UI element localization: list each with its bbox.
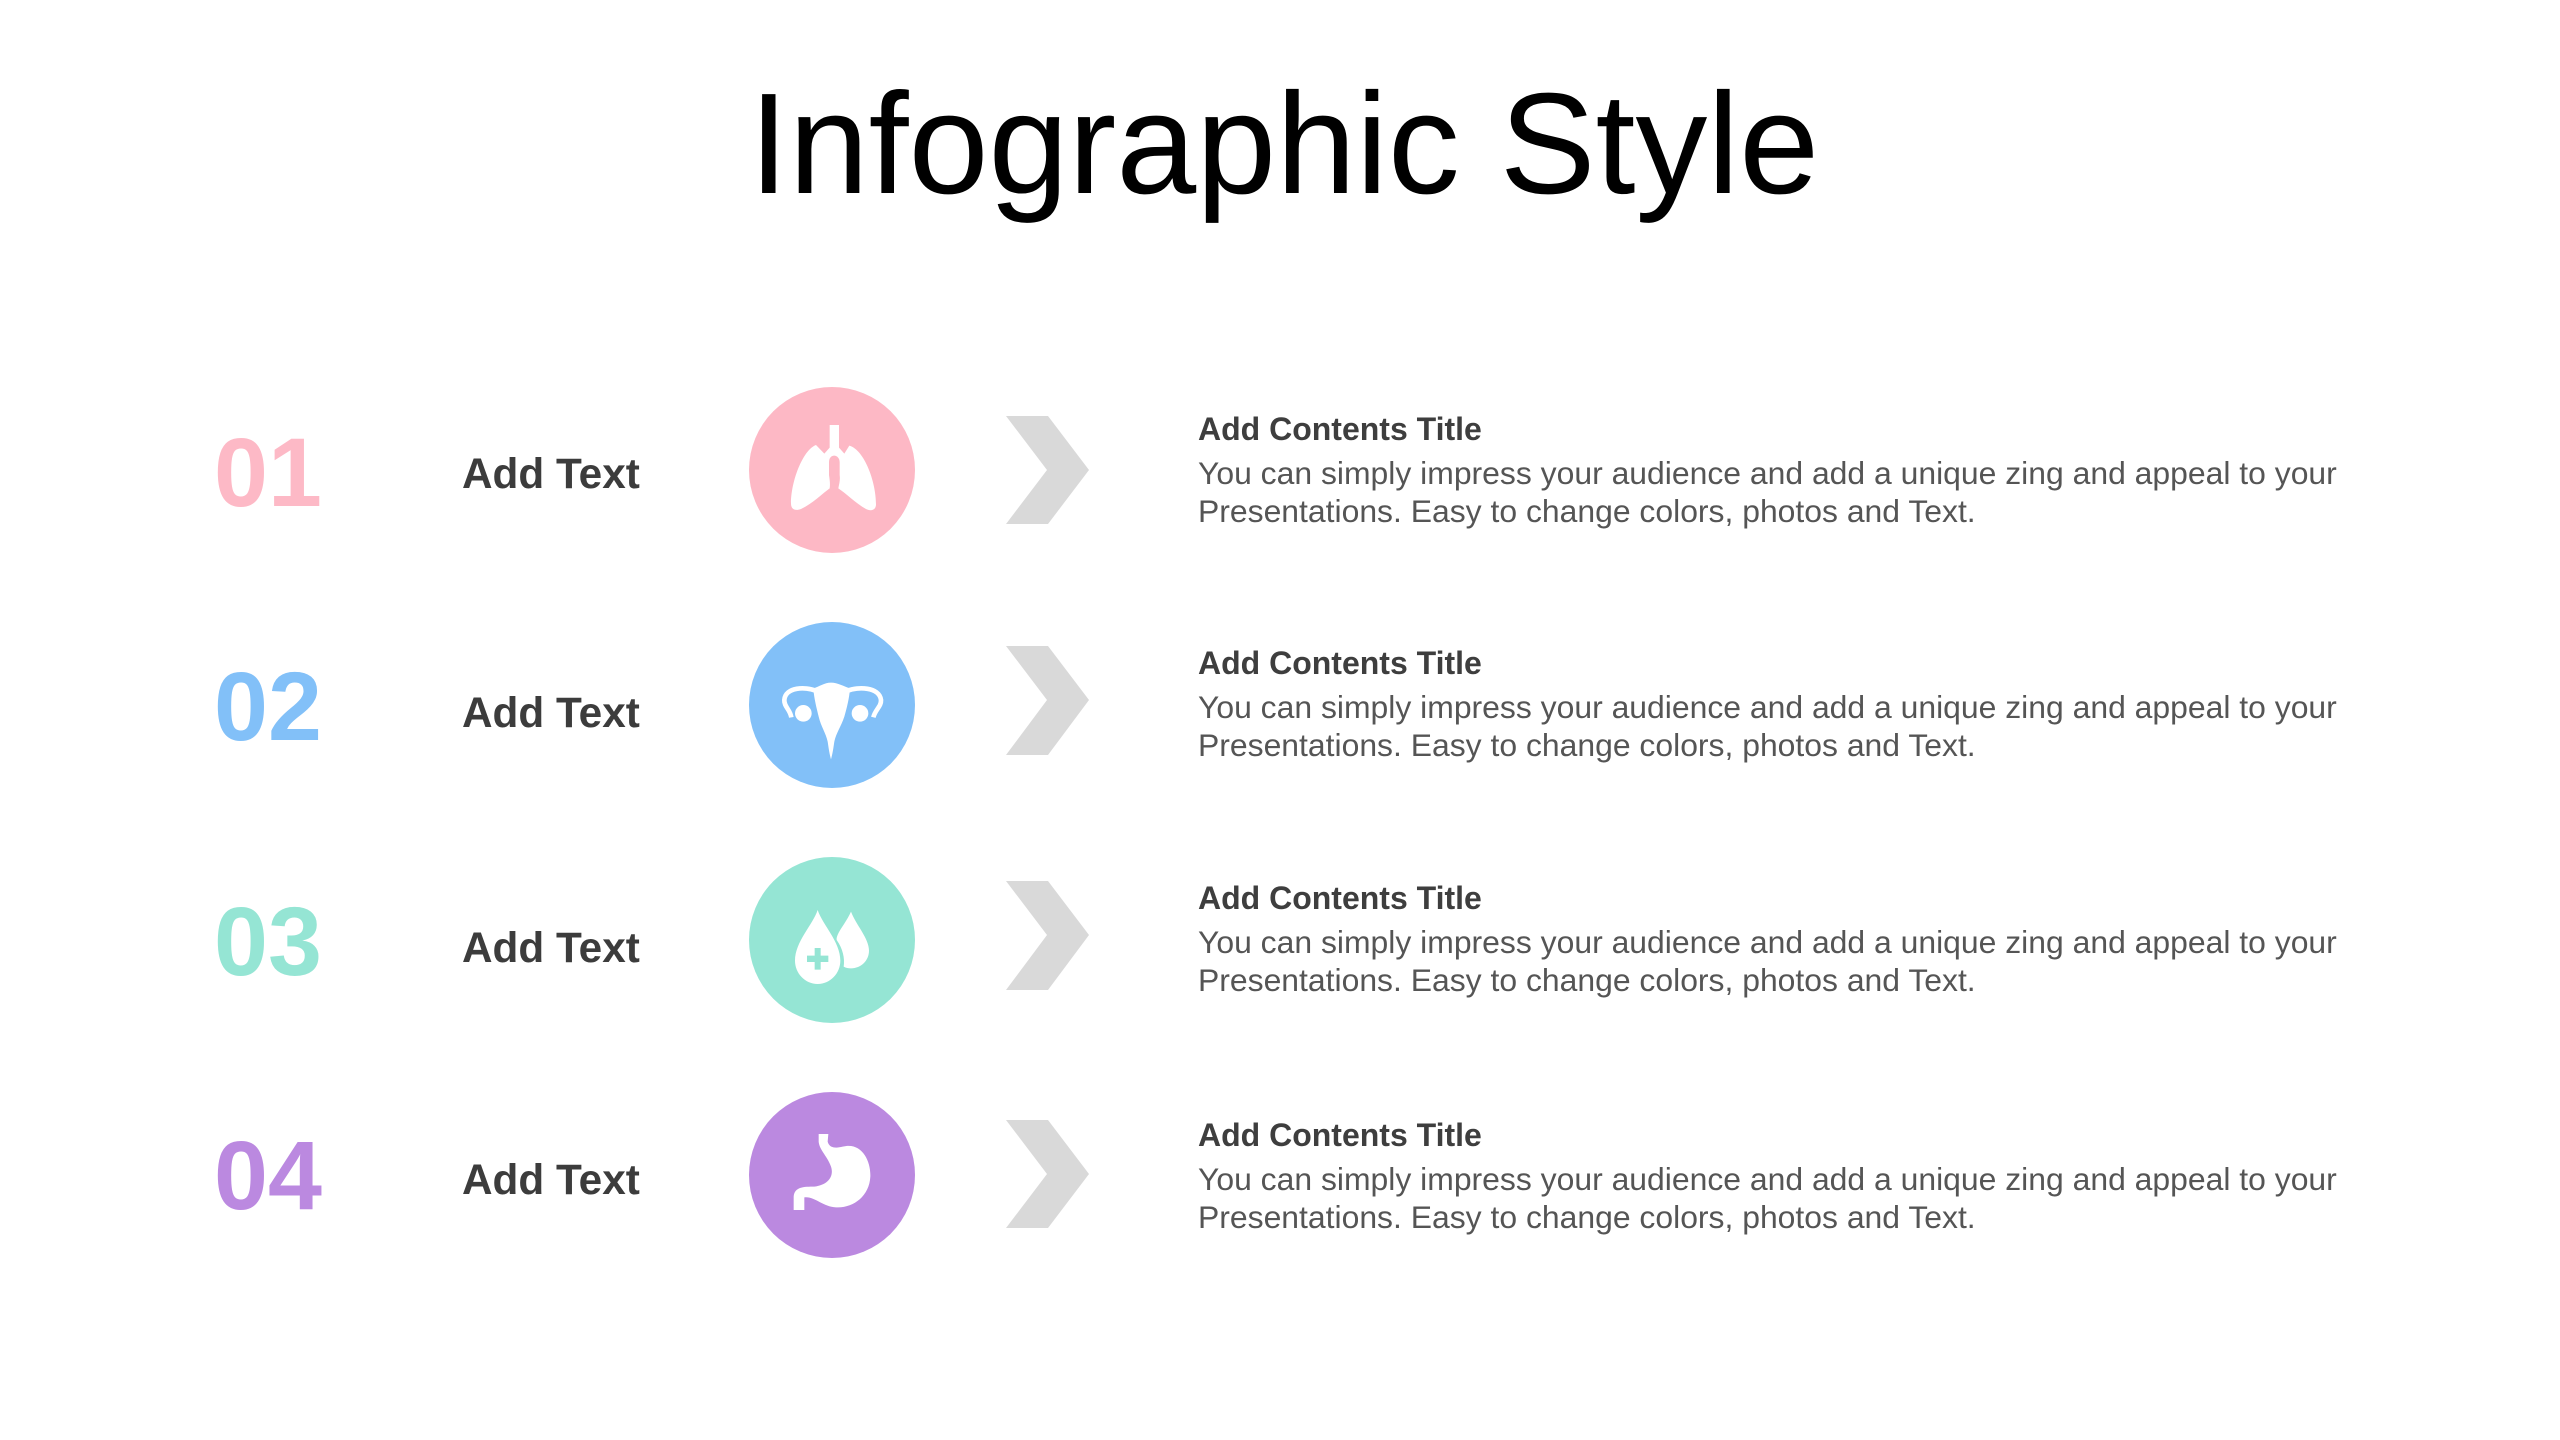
text block 1: You can simply impress your audience and add a unique zing and appeal to your <box>1198 455 2337 491</box>
arrow: chevron 1 <box>1006 416 1089 524</box>
icon: stomach in purple circle <box>749 1092 915 1258</box>
label: add text 2: Add Text <box>462 689 640 736</box>
text block 3: Presentations. Easy to change colors, photos and Text. <box>1198 962 1976 998</box>
text block 2: Add Contents Title <box>1198 645 1482 681</box>
text block 1: Presentations. Easy to change colors, photos and Text. <box>1198 493 1976 529</box>
arrow: chevron 2 <box>1006 646 1089 755</box>
icon: uterus in blue circle <box>749 622 915 788</box>
label: add text 1: Add Text <box>462 450 640 497</box>
text block 2 <box>1198 645 2337 763</box>
text block 3: Add Contents Title <box>1198 880 1482 916</box>
label: add text 3: Add Text <box>462 924 640 971</box>
label: add text 4: Add Text <box>462 1156 640 1203</box>
text block 1 <box>1198 411 2337 529</box>
row 3 <box>214 857 2337 1023</box>
number 04: 04 <box>214 1121 322 1230</box>
icon: drops in teal circle <box>749 857 915 1023</box>
text block 2: Presentations. Easy to change colors, photos and Text. <box>1198 727 1976 763</box>
text block 2: You can simply impress your audience and add a unique zing and appeal to your <box>1198 689 2337 725</box>
arrow: chevron 4 <box>1006 1120 1089 1228</box>
arrow: chevron 3 <box>1006 881 1089 990</box>
text block 1: Add Contents Title <box>1198 411 1482 447</box>
text block 3: You can simply impress your audience and add a unique zing and appeal to your <box>1198 924 2337 960</box>
number 02: 02 <box>214 652 322 761</box>
row 2 <box>214 622 2337 788</box>
row 1 <box>214 387 2337 553</box>
text block 3 <box>1198 880 2337 998</box>
text block 4: Add Contents Title <box>1198 1117 1482 1153</box>
text block 4 <box>1198 1117 2337 1235</box>
text block 4: You can simply impress your audience and add a unique zing and appeal to your <box>1198 1161 2337 1197</box>
title: Infographic Style <box>749 64 1819 224</box>
icon: lungs in pink circle <box>749 387 915 553</box>
number 03: 03 <box>214 887 322 996</box>
number 01: 01 <box>214 418 322 527</box>
row 4 <box>214 1092 2337 1258</box>
text block 4: Presentations. Easy to change colors, photos and Text. <box>1198 1199 1976 1235</box>
